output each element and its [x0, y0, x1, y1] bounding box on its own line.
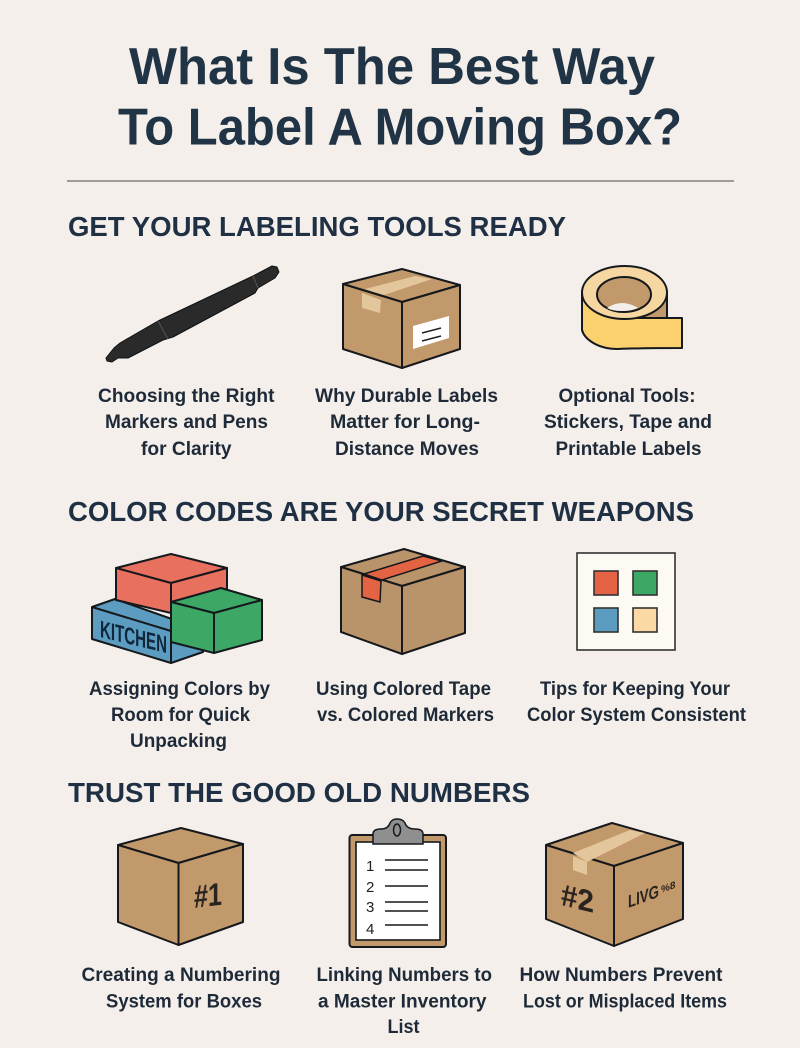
label: durable labels: Matter for Long- [330, 411, 480, 433]
label: lost items: Lost or Misplaced Items [523, 990, 727, 1012]
label: tape vs markers: vs. Colored Markers [317, 704, 494, 726]
label: tape vs markers [316, 678, 494, 726]
label: durable labels: Distance Moves [335, 438, 479, 460]
icon: box number one: #1 [194, 876, 222, 915]
label: consistent system: Color System Consistent [527, 704, 746, 726]
label: lost items [520, 964, 727, 1012]
label: consistent system [527, 678, 746, 726]
icon: box number two: LIVG [628, 880, 659, 912]
icon: clipboard inventory: 2 [366, 879, 374, 896]
icon: clipboard inventory [350, 819, 446, 947]
heading: numbers: TRUST THE GOOD OLD NUMBERS [68, 777, 530, 808]
icon: box number one [118, 828, 243, 945]
label: optional tools: Stickers, Tape and [544, 411, 712, 433]
icon: box with label [343, 269, 460, 368]
title: What Is The Best Way [129, 38, 655, 96]
icon: colored stacked boxes [92, 554, 262, 663]
icon: box with red tape [341, 549, 465, 654]
label: lost items: How Numbers Prevent [520, 964, 723, 986]
icon: tape roll [582, 266, 682, 349]
label: optional tools: Printable Labels [556, 438, 702, 460]
panel: labeling tools [68, 211, 712, 460]
icon: clipboard inventory: 4 [366, 921, 374, 938]
label: markers and pens: for Clarity [141, 438, 232, 460]
title [118, 38, 682, 156]
label: master inventory: Linking Numbers to [316, 964, 492, 986]
label: colors by room [89, 678, 270, 752]
icon: box number two [546, 823, 683, 946]
label: durable labels [315, 385, 498, 460]
label: consistent system: Tips for Keeping Your [540, 678, 730, 700]
label: master inventory: List [388, 1016, 420, 1038]
icon: marker pen [106, 266, 279, 362]
icon: clipboard inventory: 3 [366, 899, 374, 916]
icon: clipboard inventory: 1 [366, 858, 374, 875]
label: markers and pens [98, 385, 275, 460]
icon: colored stacked boxes: KITCHEN [100, 616, 167, 659]
label: numbering system [82, 964, 280, 1012]
label: colors by room: Unpacking [130, 730, 227, 752]
heading: color codes: COLOR CODES ARE YOUR SECRET WEAPONS [68, 496, 694, 527]
title: To Label A Moving Box? [118, 98, 682, 156]
panel: numbers [68, 777, 727, 1038]
icon: color swatch card [577, 553, 675, 650]
label: markers and pens: Choosing the Right [98, 385, 275, 407]
label: master inventory: a Master Inventory [318, 990, 487, 1012]
icon: box number two: #2 [561, 877, 594, 920]
label: master inventory [316, 964, 492, 1038]
label: markers and pens: Markers and Pens [105, 411, 268, 433]
heading: tools: GET YOUR LABELING TOOLS READY [68, 211, 566, 242]
label: tape vs markers: Using Colored Tape [316, 678, 491, 700]
panel: color codes [68, 496, 746, 752]
icon: box number two: %8 [661, 880, 676, 896]
label: durable labels: Why Durable Labels [315, 385, 498, 407]
label: colors by room: Assigning Colors by [89, 678, 270, 700]
label: optional tools: Optional Tools: [558, 385, 696, 407]
label: optional tools [544, 385, 712, 460]
label: numbering system: System for Boxes [106, 990, 262, 1012]
label: colors by room: Room for Quick [111, 704, 250, 726]
label: numbering system: Creating a Numbering [82, 964, 280, 986]
